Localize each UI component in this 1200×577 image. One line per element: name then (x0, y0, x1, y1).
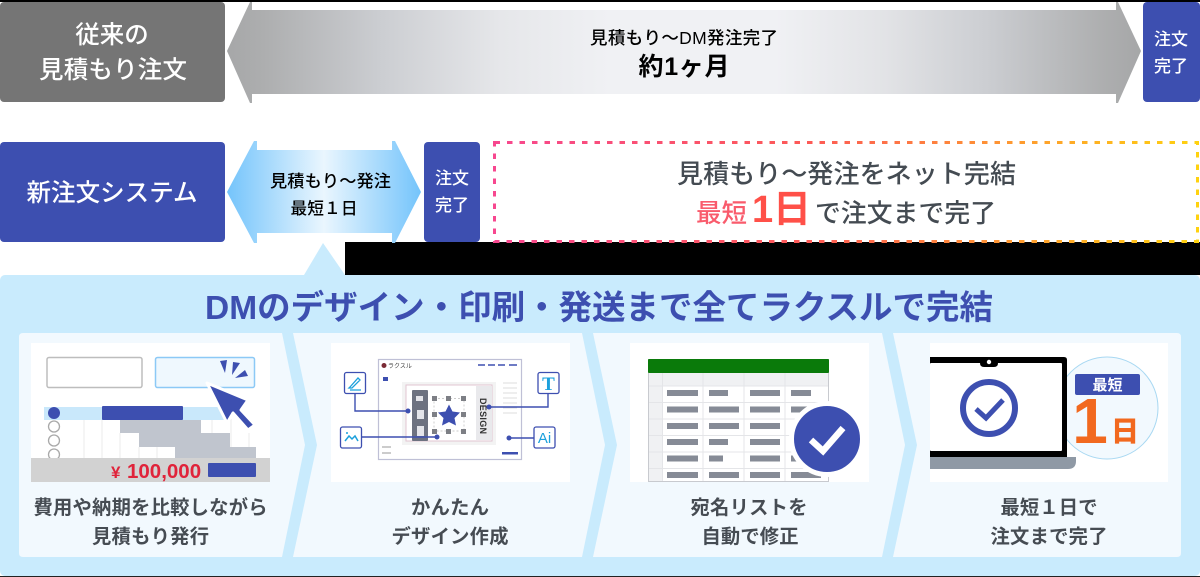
card: compare estimates: ¥ (111, 463, 121, 482)
arrow: new system duration (227, 141, 421, 243)
card: auto-correct address list: 自動で修正 (702, 526, 798, 548)
arrow: new system duration: 最短１日 (290, 199, 358, 218)
card: easy design: かんたん (411, 497, 489, 519)
panel: order complete (conventional) (1143, 2, 1200, 102)
card: easy design: DESIGN (478, 398, 488, 434)
callout: complete online, shortest one day: 1日 (752, 189, 811, 231)
callout: complete online, shortest one day (494, 142, 1198, 242)
callout: complete online, shortest one day: 最短 (696, 200, 747, 228)
panel: order complete (conventional): 完了 (1154, 57, 1188, 76)
arrow: conventional duration: 見積もり〜DM発注完了 (590, 28, 778, 48)
card: auto-correct address list: 宛名リストを (690, 497, 808, 519)
card: easy design: Ai (538, 430, 551, 447)
card: easy design: ラクスル (388, 363, 412, 370)
panel: order complete (new) (424, 142, 480, 242)
arrow: new system duration: 見積もり〜発注 (270, 171, 391, 191)
card: compare estimates: 100,000 (127, 460, 201, 483)
card: order complete in one day: 最短１日で (1000, 497, 1098, 519)
card: auto-correct address list (593, 333, 905, 557)
arrow: conventional duration: 約1ヶ月 (638, 53, 730, 81)
card: order complete in one day: 日 (1111, 416, 1139, 447)
panel: order complete (new): 注文 (435, 169, 469, 188)
panel: new order system label: 新注文システム (26, 179, 198, 207)
panel: order complete (new): 完了 (435, 196, 469, 215)
callout: complete online, shortest one day: 見積もり〜発注をネット完結 (677, 159, 1016, 189)
arrow: conventional duration (227, 2, 1141, 103)
callout: complete online, shortest one day: で注文まで完了 (815, 199, 996, 228)
heading: DMのデザイン・印刷・発送まで全てラクスルで完結 (205, 289, 993, 327)
card: easy design (293, 333, 605, 557)
card: easy design: T (542, 374, 555, 395)
card: order complete in one day: 最短 (1092, 376, 1123, 394)
panel: conventional label (0, 2, 225, 102)
card: order complete in one day (893, 333, 1181, 557)
panel: conventional label: 見積もり注文 (39, 56, 187, 84)
card: compare estimates: 費用や納期を比較しながら (34, 496, 268, 519)
card: order complete in one day: 注文まで完了 (990, 526, 1108, 548)
card: easy design: デザイン作成 (392, 525, 508, 548)
card: order complete in one day: 1 (1072, 385, 1108, 457)
card: compare estimates (19, 333, 305, 557)
panel: order complete (conventional): 注文 (1154, 30, 1188, 49)
panel: new order system label (0, 142, 225, 242)
panel: all-in-one service (0, 243, 1200, 576)
card: compare estimates: 見積もり発行 (92, 526, 209, 548)
panel: conventional label: 従来の (75, 21, 149, 49)
